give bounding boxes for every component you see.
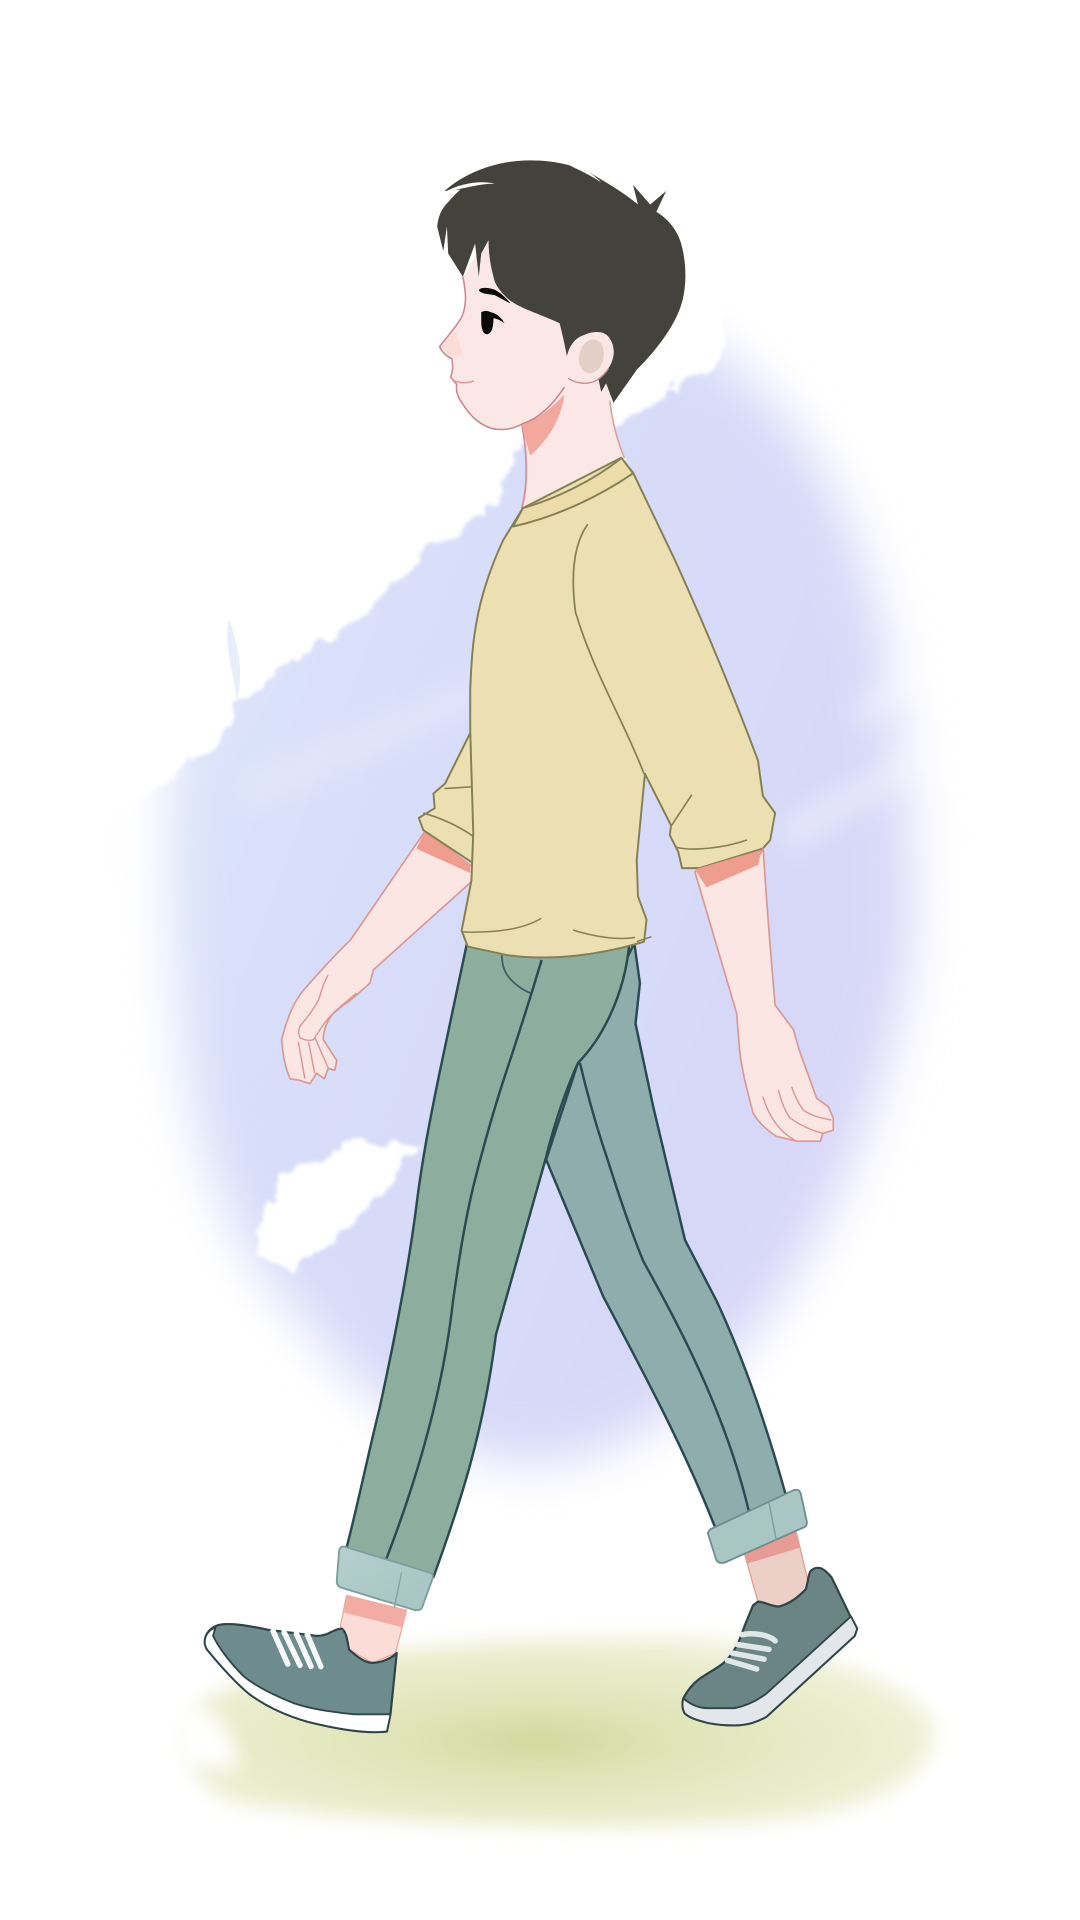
inner sleeve band [695,850,762,887]
near arm [695,849,833,1141]
blue watercolor wash [0,0,943,1464]
back trouser leg [546,943,786,1531]
far sleeve [419,733,480,863]
hair highlights [444,165,601,192]
eye [481,311,504,334]
face [440,233,576,430]
neck shadow [522,394,564,456]
sweater body [462,458,775,957]
head [437,160,685,430]
sleeve cuff lines [672,795,747,849]
front leg [337,943,629,1610]
pale streaks [245,686,490,796]
eyebrow [479,288,511,304]
seam [384,960,542,1564]
front ankle [340,1596,407,1663]
front shoe [205,1624,397,1732]
shoe laces [727,1634,775,1669]
inner ear [576,337,607,376]
shoe laces [273,1631,321,1667]
face outline [440,277,564,430]
hem wrinkles [462,918,651,942]
pocket [502,955,530,993]
far inner band [416,831,470,873]
far arm [282,733,480,1084]
far forearm and hand [282,831,473,1084]
neck [522,367,627,509]
collar [513,458,633,527]
white notch [178,1707,239,1769]
hair [437,160,685,403]
back shoe [682,1568,857,1725]
back ankle [742,1531,811,1607]
front cuff [337,1547,433,1610]
near forearm and hand [695,849,833,1141]
pale wisp [227,620,240,700]
white cloud streak [253,1141,424,1273]
sleeve seam [573,524,644,774]
back leg [546,943,811,1607]
back cuff [708,1490,807,1563]
ear [567,332,614,383]
ground shadow [178,1637,934,1827]
nose tint [441,331,463,358]
jagged white edge, upper left [0,0,784,833]
mouth [454,381,474,383]
